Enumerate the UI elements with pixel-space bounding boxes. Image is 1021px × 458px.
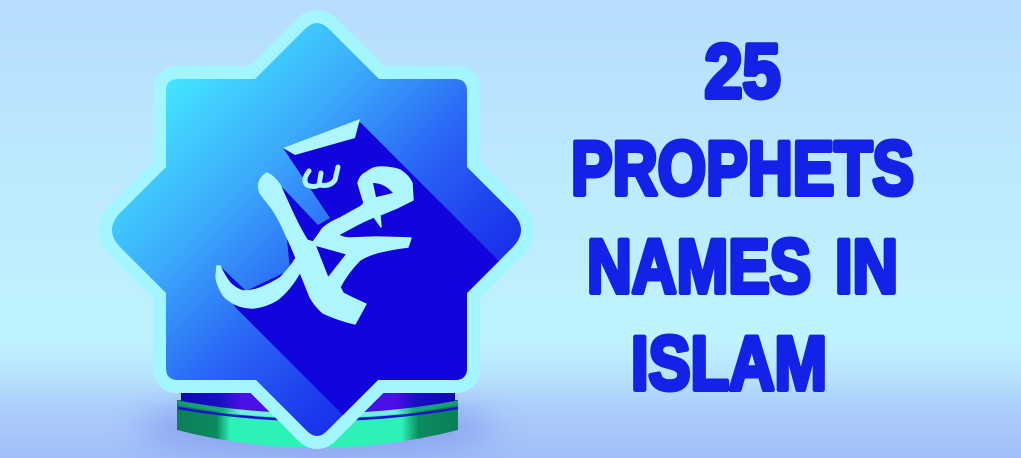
title line: NAMES IN: IN (835, 224, 898, 310)
title line: 25: 25 (704, 30, 780, 114)
floor shadow (137, 402, 497, 454)
word body (216, 167, 413, 324)
calligraphy: Muhammad (216, 119, 413, 324)
title line: PROPHETS: PROPHETS (571, 126, 914, 212)
badge glow outline (112, 23, 521, 436)
title line: ISLAM: ISLAM (631, 322, 827, 406)
meem counter (373, 183, 393, 197)
badge face (112, 23, 521, 436)
pedestal (177, 393, 458, 448)
title line: NAMES IN: NAMES (587, 224, 811, 310)
title (571, 30, 914, 406)
seen mark (305, 167, 338, 186)
overline (283, 119, 360, 155)
octagram badge (112, 23, 540, 458)
long shadow (221, 122, 499, 415)
